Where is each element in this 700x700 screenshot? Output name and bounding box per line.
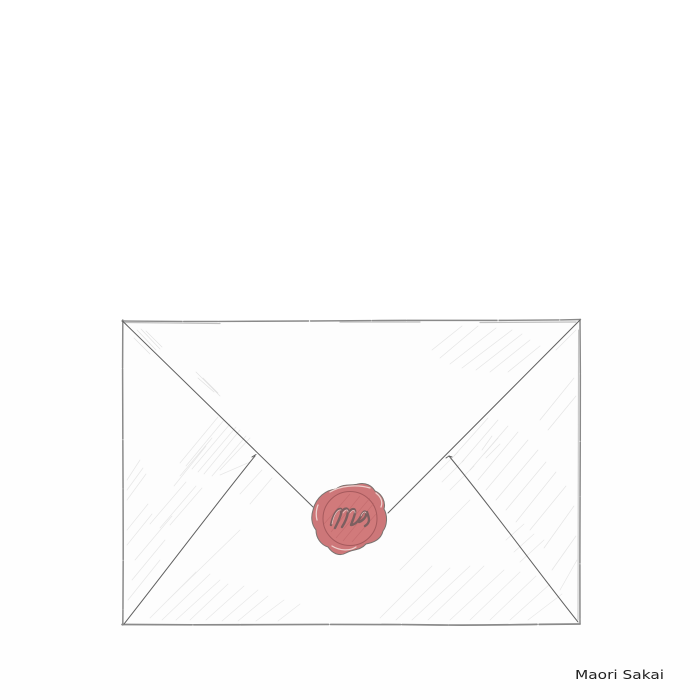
seal inner disc [323,492,377,546]
flap edges [122,320,580,513]
seal hatching [324,494,376,542]
seal highlights [316,486,382,550]
envelope [122,320,580,625]
monogram [331,509,369,528]
hatching: right panel shading [432,326,577,590]
envelope outline [122,320,580,625]
hatching: bottom panel shading [150,452,562,621]
seal body [312,483,387,555]
signature: Maori Sakai [575,668,664,682]
hatching: upper-left flap shading [134,329,220,396]
lower panel fold lines [124,454,578,624]
wax seal [312,483,387,555]
envelope paper [122,320,580,625]
hatching: left panel shading [127,417,250,600]
